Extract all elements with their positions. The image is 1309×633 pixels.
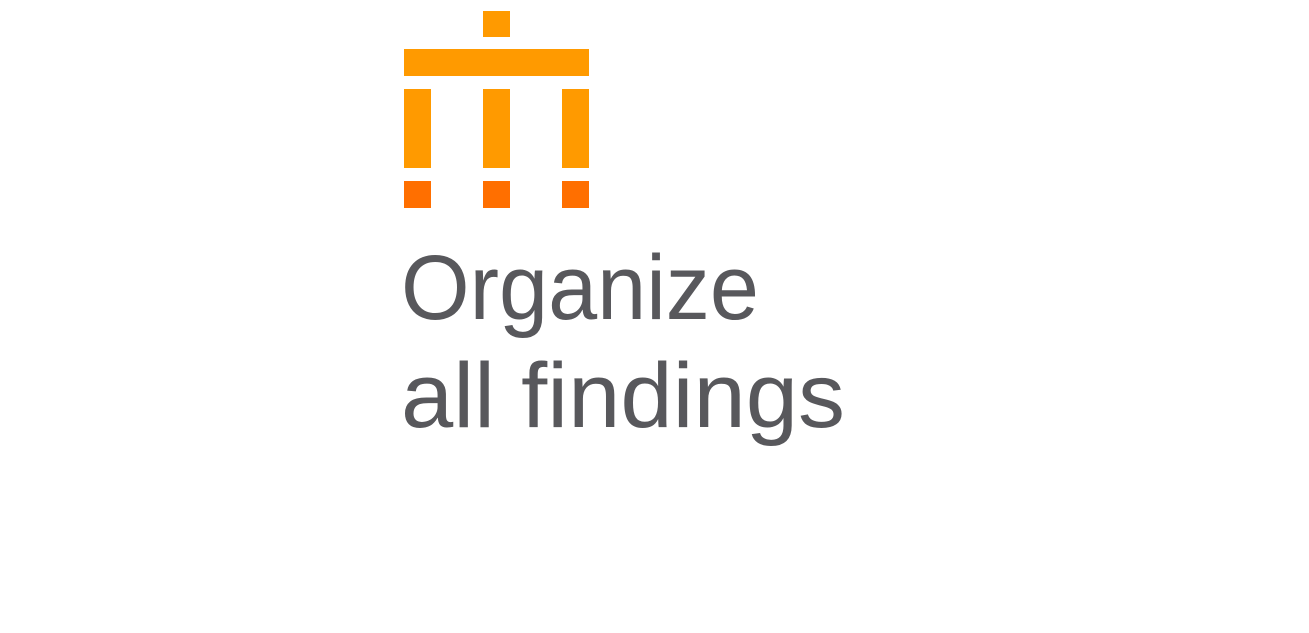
icon: organize structure: [404, 11, 589, 208]
title: [401, 237, 845, 447]
title: all findings: [401, 345, 845, 447]
title: Organize: [401, 237, 759, 339]
